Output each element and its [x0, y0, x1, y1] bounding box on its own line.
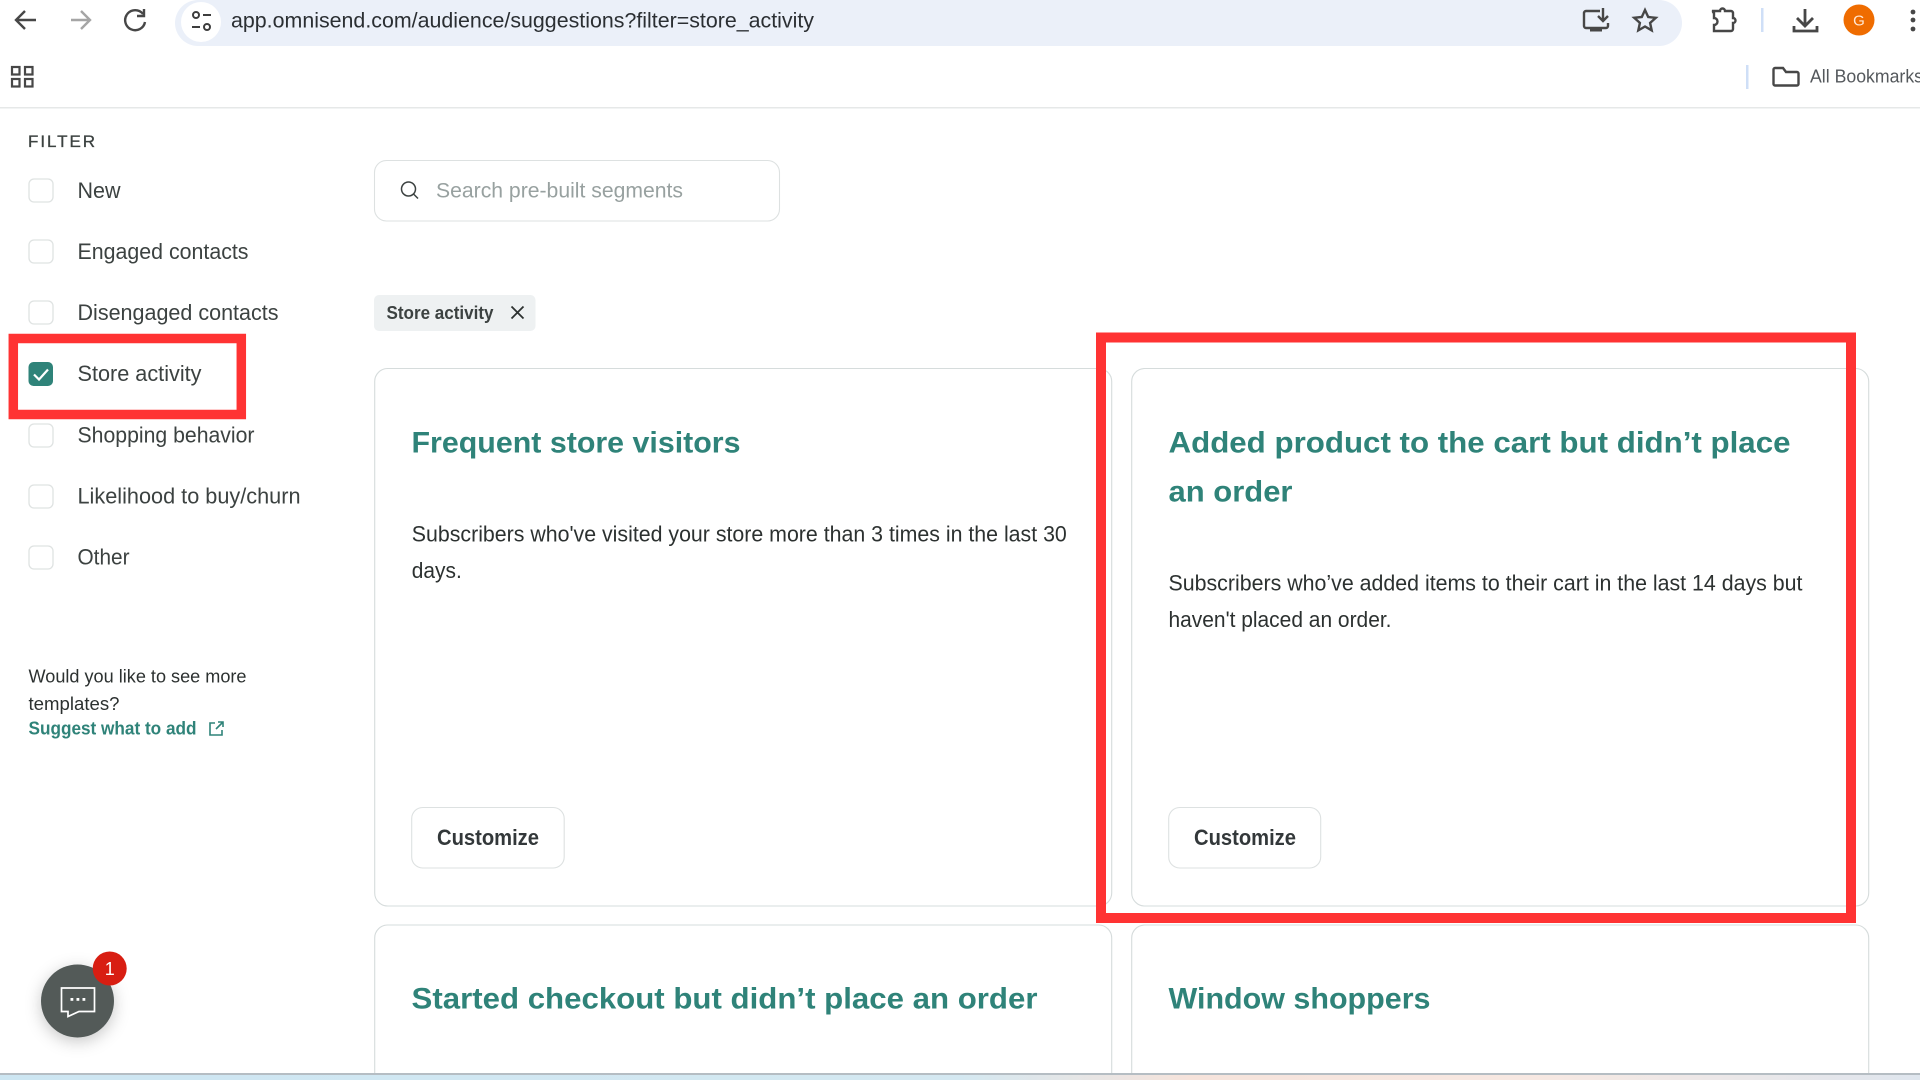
panel: frequent store visitors card: Subscribers who've visited your store more than 3 times in the last 30 — [412, 522, 1067, 546]
suggestion text: Suggest what to add — [28, 718, 196, 738]
address bar: app.omnisend.com/audience/suggestions?filter=store_activity — [231, 10, 815, 32]
icon: apps grid — [12, 67, 32, 86]
button: customize: Customize — [1194, 825, 1296, 850]
button: customize: Customize — [437, 825, 539, 850]
panel: added product to cart card: an order — [1168, 476, 1293, 508]
panel: window shoppers card — [1132, 925, 1869, 1074]
red highlight: added product card — [1101, 338, 1851, 918]
icon: menu dots — [1911, 10, 1915, 31]
filter option: New: New — [78, 178, 121, 203]
heading: filter: FILTER — [28, 132, 95, 151]
filter option: Engaged contacts: Engaged contacts — [78, 239, 248, 264]
panel: added product to cart card: Subscribers who’ve added items to their cart in the last 14 days but — [1168, 570, 1802, 596]
avatar: G — [1853, 12, 1865, 30]
search box — [374, 160, 780, 221]
panel: filter sidebar — [28, 132, 300, 738]
filter option: New — [29, 178, 121, 203]
address bar — [175, 0, 1682, 46]
chat widget — [41, 952, 127, 1038]
icon: downloads — [1794, 9, 1817, 31]
divider — [1761, 8, 1764, 32]
filter option: Other: Other — [78, 544, 130, 570]
icon: forward arrow — [71, 11, 90, 29]
button: customize — [1169, 808, 1321, 868]
panel: frequent store visitors card: days. — [412, 558, 462, 583]
panel: added product to cart card: Added product to the cart but didn’t place — [1168, 426, 1790, 460]
icon: back arrow — [16, 11, 36, 29]
panel: frequent store visitors card — [375, 368, 1112, 906]
filter option: Shopping behavior: Shopping behavior — [78, 422, 254, 448]
active filter chip: Store activity — [386, 303, 494, 323]
panel: started checkout card: Started checkout but didn’t place an order — [412, 982, 1038, 1016]
browser toolbar — [16, 0, 1915, 46]
icon: install app — [1584, 8, 1608, 30]
notification badge: 1 — [105, 959, 115, 979]
icon: bookmark star — [1634, 10, 1656, 30]
avatar — [1844, 4, 1874, 36]
filter option: Disengaged contacts: Disengaged contacts — [78, 300, 278, 325]
filter option: Store activity checked: Store activity — [78, 361, 202, 386]
active filter chip — [374, 295, 536, 331]
filter option: Likelihood to buy/churn: Likelihood to buy/churn — [78, 484, 300, 508]
icon: extensions — [1713, 8, 1735, 31]
red highlight: store activity filter — [13, 338, 241, 414]
panel: frequent store visitors card: Frequent store visitors — [412, 426, 740, 460]
panel: started checkout card — [375, 925, 1112, 1074]
icon: folder — [1774, 68, 1798, 86]
bookmarks bar — [0, 65, 1920, 108]
desktop strip at bottom edge — [0, 1073, 1920, 1080]
panel: added product to cart card — [1132, 368, 1869, 906]
suggestion text: templates? — [28, 694, 120, 714]
filter option: Other — [29, 544, 130, 570]
panel: added product to cart card: haven't placed an order. — [1168, 607, 1392, 632]
suggestion text — [28, 666, 246, 738]
icon: reload — [125, 9, 145, 30]
suggestion text: Would you like to see more — [28, 666, 246, 686]
panel: window shoppers card: Window shoppers — [1168, 982, 1430, 1016]
button: customize — [412, 808, 564, 868]
search box: Search pre-built segments — [436, 178, 683, 202]
